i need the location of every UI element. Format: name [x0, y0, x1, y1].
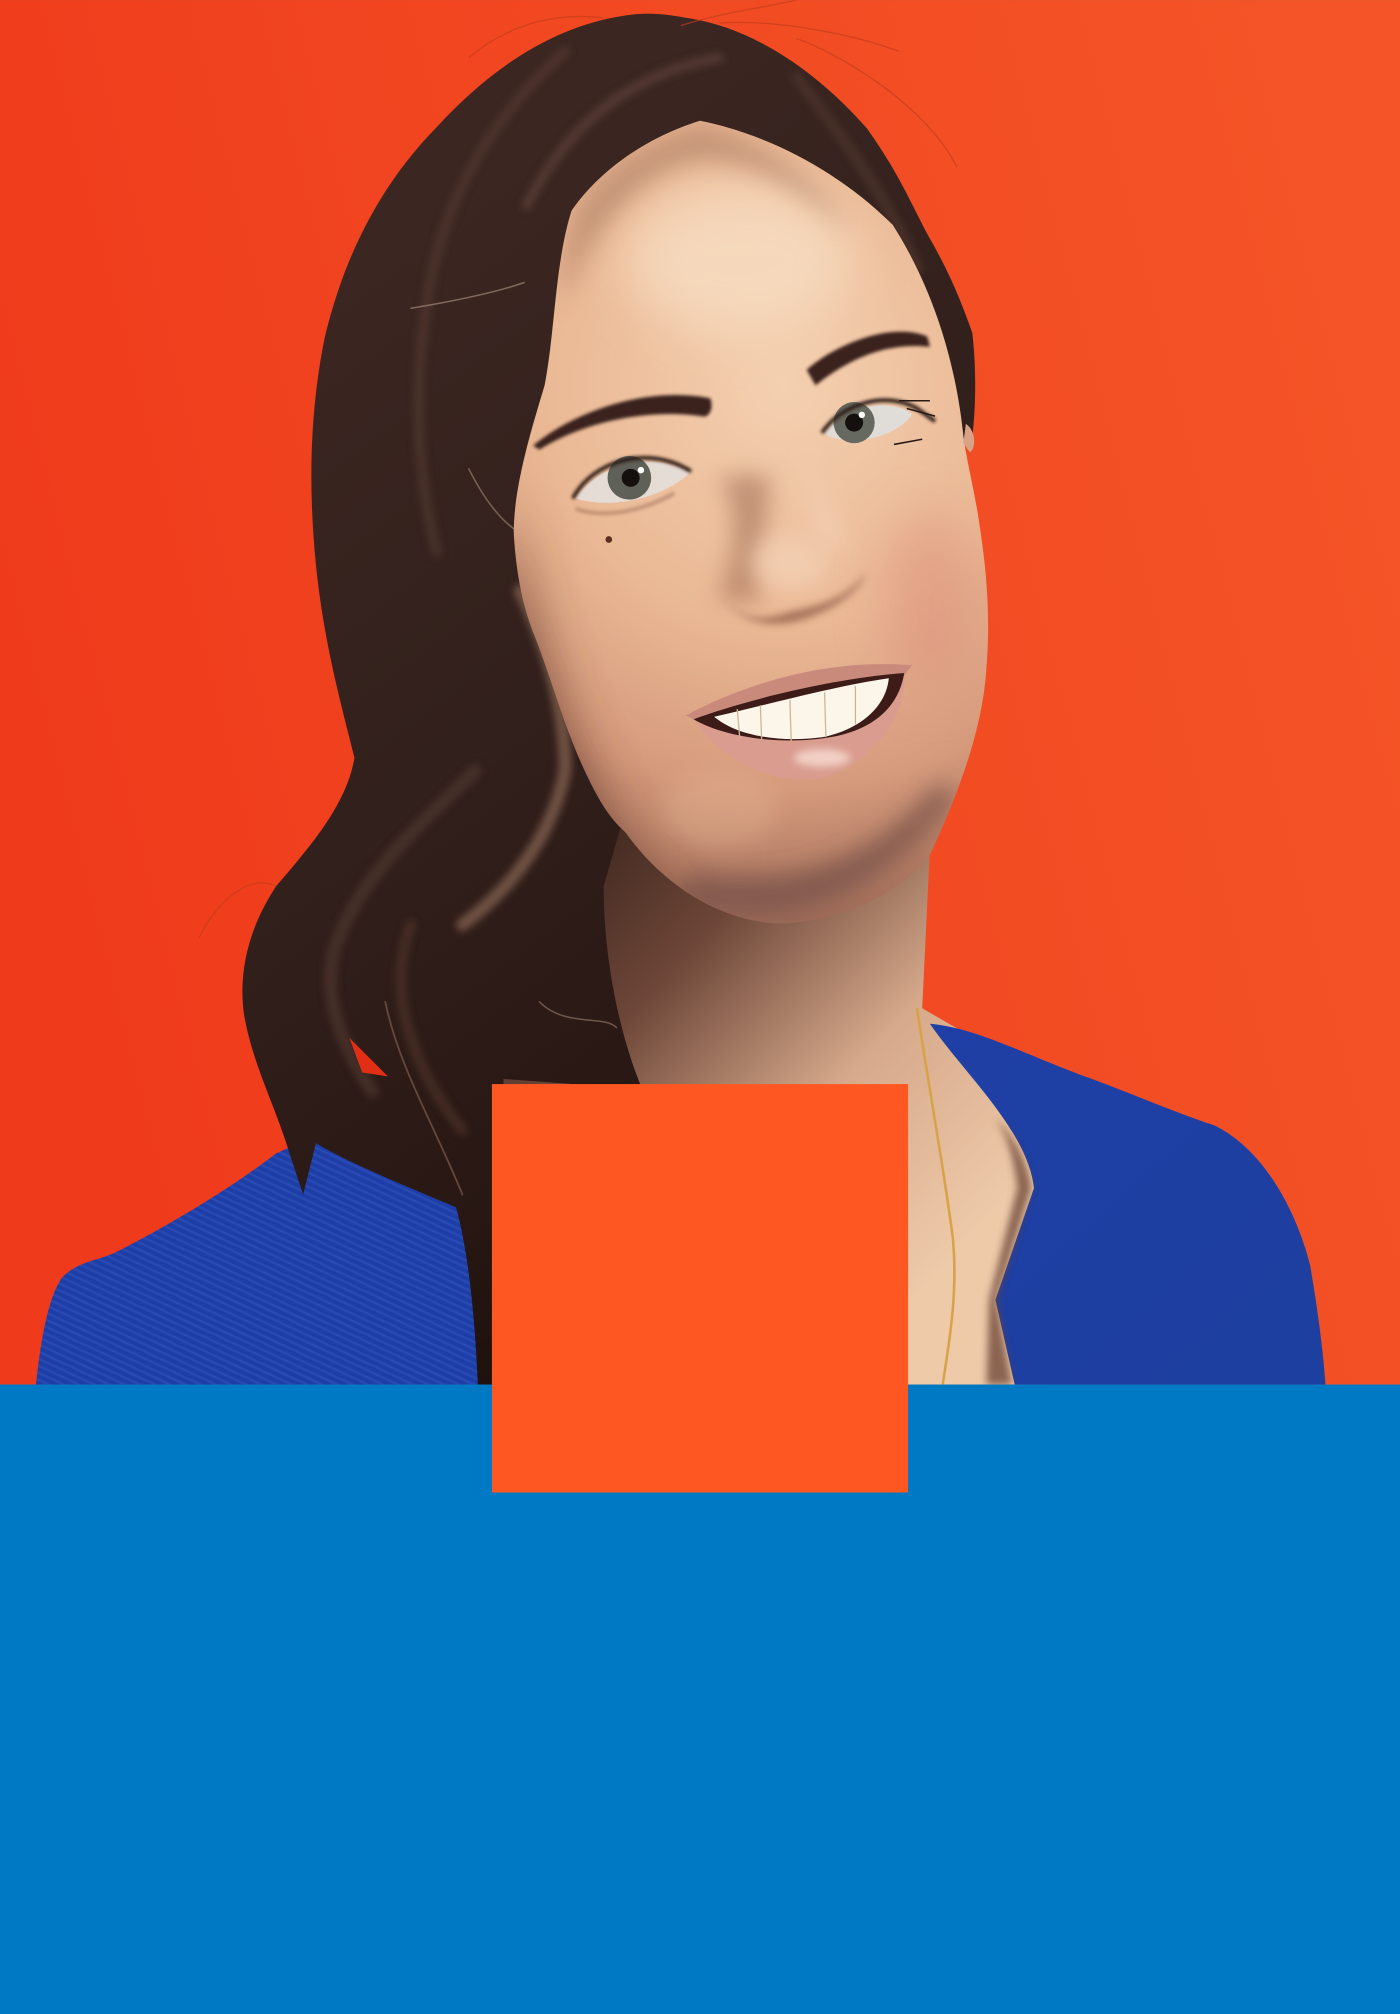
right eyebrow	[807, 332, 930, 385]
freckle mole	[605, 536, 612, 543]
neck and chest	[504, 828, 1034, 1384]
red gap in hair	[349, 1038, 388, 1076]
nose	[723, 534, 866, 624]
hair highlights	[331, 51, 918, 1195]
gold necklace	[917, 1008, 954, 1385]
face shading	[488, 126, 976, 925]
blue jacket right lapel	[930, 1024, 1326, 1385]
woman portrait	[36, 0, 1326, 1385]
infographic page	[0, 0, 1400, 1492]
jacket collar shading	[986, 1117, 1031, 1385]
flyaway hairs on top	[199, 0, 957, 938]
portrait illustration	[0, 0, 1400, 1492]
left eyebrow	[533, 395, 712, 450]
blue lower panel	[0, 1385, 1400, 2014]
face	[488, 121, 988, 925]
blue jacket left shoulder	[36, 1133, 503, 1385]
orange photo background	[0, 0, 1400, 1385]
smile	[686, 664, 912, 780]
long brown hair	[242, 14, 975, 1385]
orange square accent	[492, 1084, 908, 1493]
ear hint	[963, 424, 974, 452]
left eye	[573, 456, 691, 513]
right eye	[822, 400, 935, 444]
